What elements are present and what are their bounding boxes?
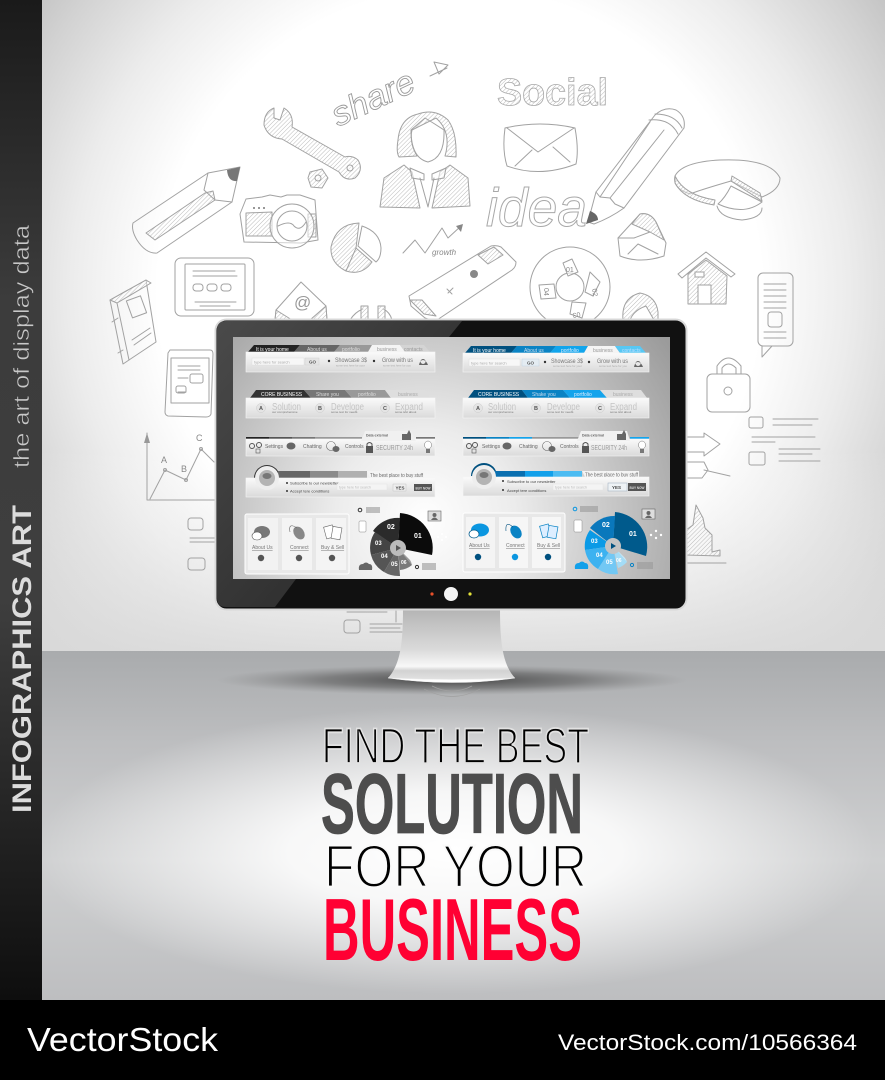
screen: blue newsletter bar: [463, 463, 649, 496]
sketch: line chart ABC: A: [161, 455, 167, 465]
sketch: mail envelope: [504, 124, 577, 172]
sketch: left phone: [165, 350, 213, 417]
screen: grey newsletter bar: YES: [396, 486, 405, 490]
screen: blue navigation bar: some text here for your: [553, 364, 582, 368]
sidebar tagline: the art of display data: [9, 224, 34, 468]
screen: blue navigation bar: some text here for you: [599, 364, 627, 368]
headline line 1: FIND THE BEST: [322, 718, 589, 774]
screen: blue newsletter bar: YES: [612, 485, 621, 490]
screen: grey core business bar: Solution: [272, 402, 301, 413]
monitor buttons: [430, 587, 472, 601]
screen: grey navigation bar: [246, 345, 435, 372]
screen: blue settings bar: [463, 430, 649, 456]
screen: grey service cards: [245, 514, 349, 574]
screen: blue core business bar: B: [534, 406, 538, 412]
screen: grey newsletter bar: type here for search: [339, 486, 371, 490]
screen: blue core business bar: some text about: [610, 410, 632, 414]
screen: grey core business bar: some text about: [395, 410, 417, 414]
sketch: camera: [240, 195, 318, 248]
screen: blue navigation bar: About us: [524, 348, 544, 354]
sketch: at envelope: @: [294, 293, 311, 312]
screen: grey settings bar: [246, 430, 435, 456]
screen: grey core business bar: A: [259, 406, 263, 412]
floor shadow: [217, 665, 687, 695]
sketch: padlock: [707, 358, 750, 412]
screen: blue navigation bar: GO: [527, 360, 535, 366]
screen: grey navigation bar: business: [377, 347, 397, 353]
sketch: 3d pie chart: [675, 160, 780, 220]
screen: grey pie chart: 05: [391, 562, 398, 568]
screen: grey newsletter bar: Subscribe to our newsletter: [290, 480, 339, 486]
sketch: growth chart: [403, 224, 463, 257]
sketch: left pencil: [132, 167, 240, 253]
sketch: disc diagram: 03: [572, 310, 581, 318]
screen: blue navigation bar: It is your home: [473, 348, 506, 354]
screen: blue service cards: Buy & Sell: [537, 543, 560, 549]
screen: blue settings bar: Chatting: [519, 444, 538, 450]
wall background: [42, 0, 885, 652]
screen: grey core business bar: B: [318, 406, 322, 412]
screen: grey navigation bar: type here for search: [254, 360, 290, 364]
screen: blue core business bar: A: [476, 406, 480, 412]
screen: blue core business bar: C: [598, 406, 602, 412]
screen: grey settings bar: SECURITY 24h: [376, 445, 413, 452]
screen: grey core business bar: CORE BUSINESS: [261, 392, 303, 398]
sketch: left note boxes: [188, 518, 215, 570]
screen: grey navigation bar: some text here for you: [383, 364, 411, 368]
screen: blue settings bar: Data external: [582, 434, 604, 438]
screen: grey navigation bar: About us: [307, 347, 327, 353]
screen: blue pie chart: 03: [591, 539, 598, 545]
screen: blue core business bar: Solution: [488, 402, 516, 413]
screen: blue pie chart: 02: [602, 522, 610, 529]
screen: blue navigation bar: Showcase 3$: [551, 358, 583, 365]
screen: blue settings bar: Controls: [560, 444, 579, 450]
screen: grey newsletter bar: Accept tere conditions: [290, 488, 329, 494]
monitor screen: [233, 337, 670, 579]
screen: grey navigation bar: some text here for your: [336, 364, 365, 368]
screen: grey navigation bar: It is your home: [256, 347, 289, 353]
screen: blue pie chart: [573, 506, 662, 574]
sketch: share arrow: [430, 62, 448, 76]
sketch: growth chart: growth: [432, 248, 457, 257]
monitor stand: [388, 609, 515, 696]
screen: grey service cards: Connect: [290, 545, 309, 551]
screen: grey navigation bar: GO: [309, 360, 317, 364]
screen: blue pie chart: 01: [629, 531, 637, 538]
headline line 4: BUSINESS: [323, 880, 582, 979]
screen: blue service cards: [463, 513, 565, 572]
screen: blue core business bar: Develope: [547, 402, 580, 413]
sketch: right text notes: [749, 417, 820, 465]
screen: grey newsletter bar: [246, 465, 435, 497]
sketch: book: [110, 280, 156, 364]
sketch: center phone: [409, 246, 516, 320]
watermark footer: [0, 1000, 885, 1080]
screen: blue core business bar: portfolio: [574, 392, 592, 398]
screen: grey core business bar: Share you: [316, 392, 339, 398]
sketch: nut: [308, 169, 328, 188]
screen: grey settings bar: Data external: [366, 434, 388, 438]
sketch: at envelope: [275, 282, 327, 320]
screen: blue newsletter bar: Accept tere conditions: [507, 488, 546, 493]
monitor gloss: [217, 321, 462, 607]
sketch: right bar chart: [686, 505, 726, 563]
sketch: disc diagram: [530, 247, 610, 327]
headline line 3: FOR YOUR: [324, 833, 587, 900]
screen: blue core business bar: some text for needs: [547, 410, 574, 414]
headline line 2: SOLUTION: [321, 757, 583, 852]
sketch: disc diagram: 04: [542, 288, 549, 296]
screen: grey navigation bar: contacts: [404, 347, 423, 353]
screen: grey service cards: About Us: [252, 545, 273, 551]
screen: blue core business bar: CORE BUSINESS: [478, 392, 520, 398]
footer url: VectorStock.com/10566364: [558, 1030, 857, 1055]
screen: blue navigation bar: business: [593, 348, 613, 354]
screen: grey core business bar: some text for needs: [331, 410, 358, 414]
sketch: tablet: [175, 258, 254, 316]
sketch: closed envelope: [618, 214, 666, 260]
screen: grey navigation bar: portfolio: [342, 347, 360, 353]
screen: grey settings bar: Chatting: [303, 444, 322, 450]
screen: grey newsletter bar: BUY NOW: [416, 486, 431, 490]
footer brand: VectorStock: [27, 1022, 218, 1059]
screen: blue navigation bar: type here for search: [471, 360, 507, 366]
screen: blue newsletter bar: Subscribe to our newsletter: [507, 479, 556, 484]
sketch: woman figure: [380, 112, 470, 208]
screen: blue service cards: Connect: [506, 543, 525, 549]
screen: blue settings bar: SECURITY 24h: [591, 445, 627, 452]
screen: grey newsletter bar: The best place to buy stuff: [370, 473, 423, 479]
screen: blue newsletter bar: type here for search: [555, 486, 587, 490]
screen: blue core business bar: business: [613, 392, 633, 398]
sketch: line chart ABC: [144, 433, 216, 500]
screen: grey pie chart: 06: [401, 560, 407, 566]
screen: blue newsletter bar: The best place to buy stuff: [585, 472, 638, 478]
screen: blue newsletter bar: BUY NOW: [630, 485, 645, 490]
monitor bezel: [216, 320, 686, 610]
screen: grey core business bar: [246, 390, 435, 418]
sketch: social lettering: Social: [497, 72, 608, 114]
screen: grey pie chart: 02: [387, 524, 395, 531]
sketch: long device note: [758, 273, 793, 357]
screen: grey core business bar: portfolio: [358, 392, 376, 398]
sketch: line chart ABC: C: [196, 433, 203, 443]
sketch: wrench: [264, 108, 360, 179]
sketch: disc diagram: 02: [590, 288, 598, 297]
sketch: partial plug icon: [350, 306, 392, 320]
sidebar: [0, 0, 42, 1000]
monitor: [216, 320, 686, 610]
screen: blue settings bar: Settings: [482, 444, 501, 450]
screen: grey core business bar: C: [383, 406, 387, 412]
sketch: hatched pie: [331, 223, 381, 272]
screen: grey settings bar: Settings: [265, 444, 284, 450]
headline: [321, 718, 589, 979]
screen: grey core business bar: business: [398, 392, 418, 398]
screen: grey navigation bar: Showcase 3$: [335, 357, 367, 364]
screen: blue pie chart: 04: [596, 553, 603, 559]
screen: blue core business bar: Shake you: [532, 392, 556, 398]
sketch: share lettering: share: [325, 63, 421, 134]
sketch: idea lettering: idea: [486, 178, 587, 238]
screen: blue navigation bar: [463, 346, 649, 372]
sketch: house: [678, 252, 735, 304]
sketch: line chart ABC: B: [181, 464, 187, 474]
sketch: small head: [623, 293, 658, 320]
sketch: note below monitor: [344, 611, 402, 633]
screen: blue navigation bar: portfolio: [561, 348, 579, 354]
screen: blue navigation bar: contacts: [622, 348, 641, 354]
screen: blue core business bar: [463, 390, 649, 418]
sidebar brand: INFOGRAPHICS ART: [7, 504, 37, 813]
screen: blue core business bar: our comprehensive: [488, 410, 514, 414]
screen: blue pie chart: 06: [616, 558, 622, 564]
screen: grey core business bar: Expand: [395, 402, 423, 413]
sketch: big pencil: [586, 109, 684, 224]
screen: grey pie chart: 04: [381, 554, 388, 560]
screen: grey pie chart: [358, 507, 447, 576]
screen: grey settings bar: Controls: [345, 444, 364, 450]
screen: grey pie chart: 01: [414, 533, 422, 540]
screen: grey service cards: Buy & Sell: [321, 545, 344, 551]
screen: blue pie chart: 05: [606, 560, 613, 566]
sketch: right arrows: [686, 433, 730, 478]
screen: blue navigation bar: Grow with us: [597, 358, 629, 365]
screen: grey core business bar: our comprehensive: [272, 410, 298, 414]
screen: grey core business bar: Develope: [331, 402, 364, 413]
floor background: [42, 651, 885, 1000]
sketch: disc diagram: 01: [566, 267, 574, 274]
screen: grey navigation bar: Grow with us: [382, 357, 414, 364]
screen: grey pie chart: 03: [375, 541, 382, 547]
screen: blue core business bar: Expand: [610, 402, 637, 413]
screen: blue service cards: About Us: [469, 543, 490, 549]
